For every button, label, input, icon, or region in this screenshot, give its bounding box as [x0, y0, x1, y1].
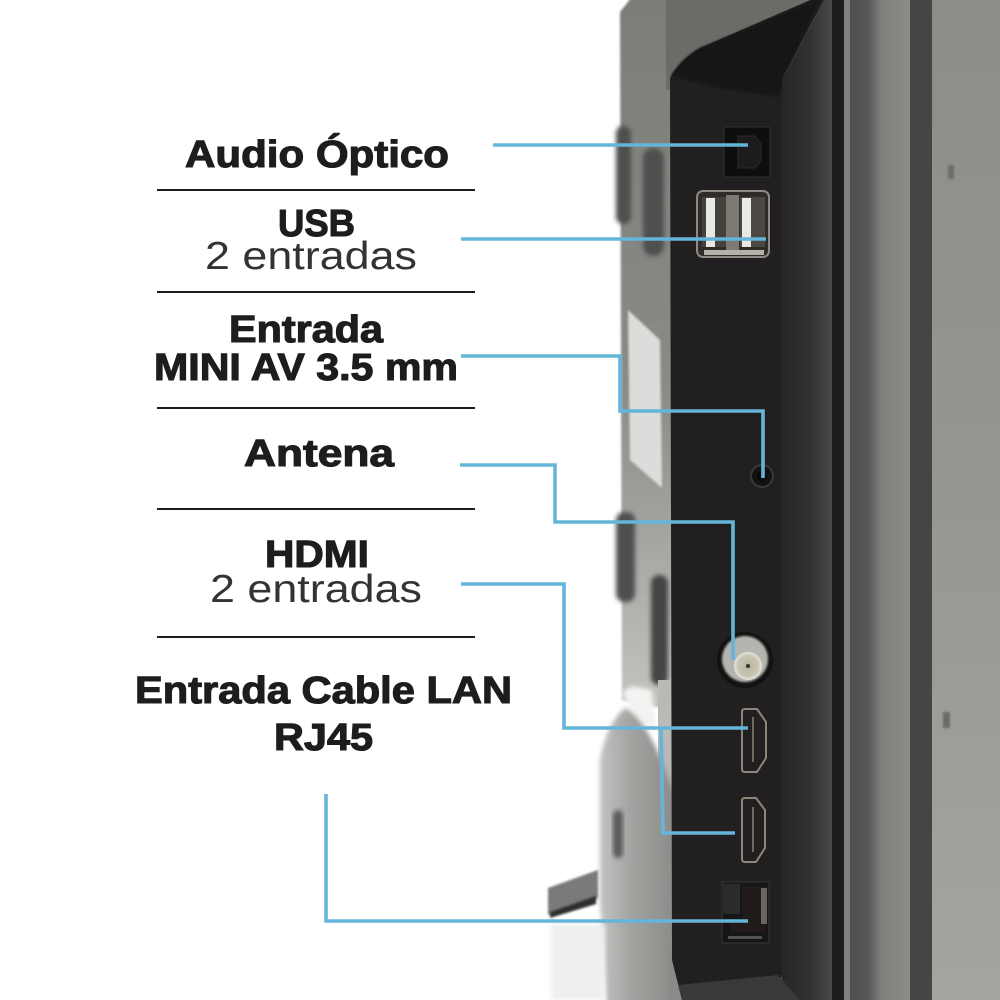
port: LAN RJ45 — [722, 882, 769, 943]
label: Audio Optico: Audio Óptico — [185, 132, 449, 176]
TV gray shell — [620, 0, 680, 712]
line: audio optico — [493, 143, 748, 147]
photo: TV side panel — [548, 0, 1000, 1000]
line: antena — [460, 465, 733, 660]
port: HDMI 2 — [742, 798, 765, 862]
label: Antena: Antena — [244, 433, 395, 475]
dividers — [157, 190, 475, 637]
port: optical audio — [724, 127, 770, 177]
label: USB 2 entradas: 2 entradas — [205, 235, 417, 278]
rear cover — [932, 0, 1000, 1000]
port: antenna coax — [717, 632, 773, 688]
line: HDMI — [461, 584, 748, 833]
label: MINI AV 3.5 mm: MINI AV 3.5 mm — [154, 347, 458, 389]
label: RJ45: RJ45 — [274, 717, 373, 759]
shell bumps — [616, 126, 668, 685]
label: USB: USB — [278, 203, 355, 245]
white label on shell — [628, 310, 662, 488]
label: Entrada: Entrada — [229, 309, 384, 351]
port: USB — [697, 191, 769, 257]
recess shadow — [671, 0, 820, 96]
connector lines — [326, 145, 766, 921]
line: mini AV — [461, 356, 763, 478]
shell ledge — [666, 0, 830, 90]
arm shadow — [550, 896, 596, 918]
black connector panel — [670, 0, 825, 1000]
port: HDMI 1 — [742, 709, 766, 772]
gap above stand — [622, 686, 656, 730]
label: HDMI 2 entradas: 2 entradas — [210, 568, 422, 611]
gray rear band — [850, 0, 912, 1000]
right black trim — [782, 0, 832, 1000]
stand dark spot — [613, 810, 623, 858]
bottom corner fill — [668, 950, 688, 1000]
port: mini AV jack — [751, 465, 773, 487]
line: USB — [461, 237, 766, 241]
stand arm — [548, 870, 598, 915]
floor — [551, 924, 605, 1000]
dark rear stripe — [910, 0, 932, 1000]
line: LAN — [326, 794, 748, 921]
label: HDMI: HDMI — [265, 534, 369, 576]
lower stand — [600, 708, 676, 1000]
label: Entrada Cable LAN: Entrada Cable LAN — [135, 670, 512, 712]
